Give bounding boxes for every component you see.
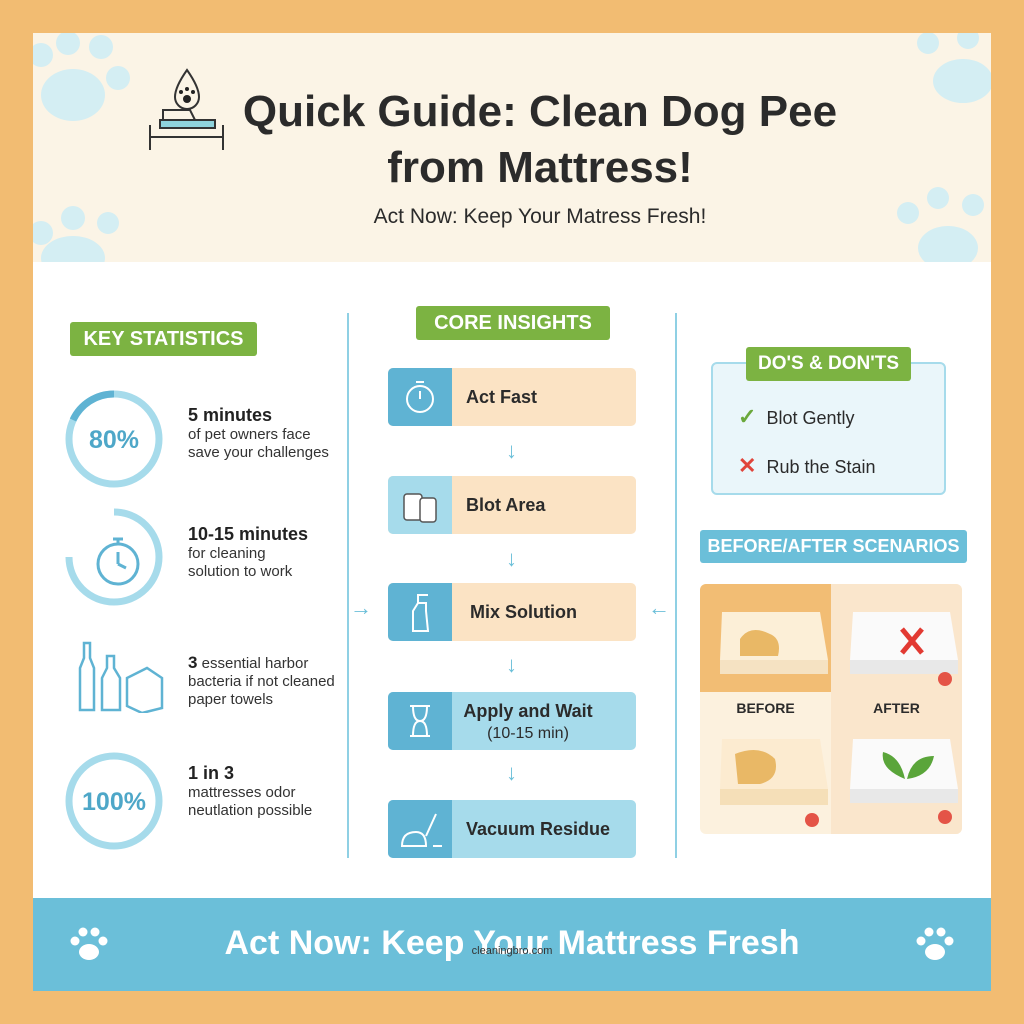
stat 4: 100% — [82, 788, 146, 816]
step: mix solution — [388, 583, 636, 641]
panel: key statistics: neutlation possible — [188, 802, 312, 819]
heading — [70, 322, 257, 356]
step: mix solution: Mix Solution — [470, 602, 577, 622]
panel: key statistics — [66, 322, 335, 850]
step: blot area: Blot Area — [466, 494, 545, 514]
step: apply and wait: Apply and Wait — [463, 701, 593, 721]
panel: key statistics: save your challenges — [188, 444, 329, 461]
text: ↓ — [506, 438, 517, 463]
step: act fast: Act Fast — [466, 386, 537, 406]
icon: paw right — [916, 928, 954, 960]
panel: key statistics: of pet owners face — [188, 426, 311, 443]
panel: key statistics: 5 minutes — [188, 405, 272, 425]
stat 4 — [66, 752, 162, 850]
heading: before/after — [700, 530, 967, 563]
step: act fast — [388, 368, 636, 426]
panel: do's and don'ts — [711, 362, 946, 495]
stat 3 — [78, 642, 164, 713]
body — [33, 262, 991, 898]
panel: key statistics: for cleaning — [188, 545, 266, 562]
panel: key statistics: mattresses odor — [188, 784, 296, 801]
text: ↓ — [506, 760, 517, 785]
step: vacuum residue: Vacuum Residue — [466, 818, 610, 838]
text: ↓ — [506, 652, 517, 677]
panel: key statistics: 1 in 3 — [188, 763, 234, 783]
subtitle: Act Now: Keep Your Matress Fresh! — [374, 205, 706, 228]
decorative paws — [33, 33, 991, 262]
heading — [746, 347, 911, 381]
panel: before after grid — [700, 584, 962, 834]
heading: core insights: CORE INSIGHTS — [434, 312, 592, 334]
icon: bed with drop — [149, 68, 224, 150]
heading: DO'S & DON'TS — [758, 353, 899, 374]
heading: before/after: BEFORE/AFTER SCENARIOS — [707, 536, 960, 556]
step: apply and wait — [388, 692, 636, 750]
side arrows: → — [350, 595, 372, 620]
watermark: cleaningbro.com — [472, 945, 552, 957]
label after: AFTER — [873, 700, 920, 716]
panel: key statistics: 3 essential harbor — [188, 653, 308, 672]
step: apply and wait: (10-15 min) — [487, 725, 569, 742]
stat 1 — [66, 390, 162, 488]
heading: KEY STATISTICS — [83, 328, 244, 350]
header — [33, 33, 991, 262]
label before: BEFORE — [736, 700, 795, 716]
title — [243, 87, 837, 192]
stat 2 — [66, 508, 162, 606]
title: from Mattress! — [387, 143, 693, 192]
text: ← — [648, 595, 670, 620]
step: vacuum residue — [388, 800, 636, 858]
icon: paw left — [70, 928, 108, 960]
heading: core insights — [416, 306, 610, 340]
panel: key statistics: solution to work — [188, 563, 292, 580]
title: Quick Guide: Clean Dog Pee — [243, 87, 837, 136]
do: ✓ Blot Gently — [738, 404, 854, 429]
stat 1: 80% — [89, 426, 139, 454]
footer banner — [33, 898, 991, 991]
dont: ✕ Rub the Stain — [738, 453, 876, 478]
panel: key statistics: 10-15 minutes — [188, 524, 308, 544]
dividers — [347, 313, 349, 858]
text: ↓ — [506, 546, 517, 571]
step: blot area — [388, 476, 636, 534]
panel: key statistics: paper towels — [188, 691, 273, 708]
panel: key statistics: bacteria if not cleaned — [188, 673, 335, 690]
footer text: Act Now: Keep Your Mattress Fresh — [224, 924, 799, 962]
